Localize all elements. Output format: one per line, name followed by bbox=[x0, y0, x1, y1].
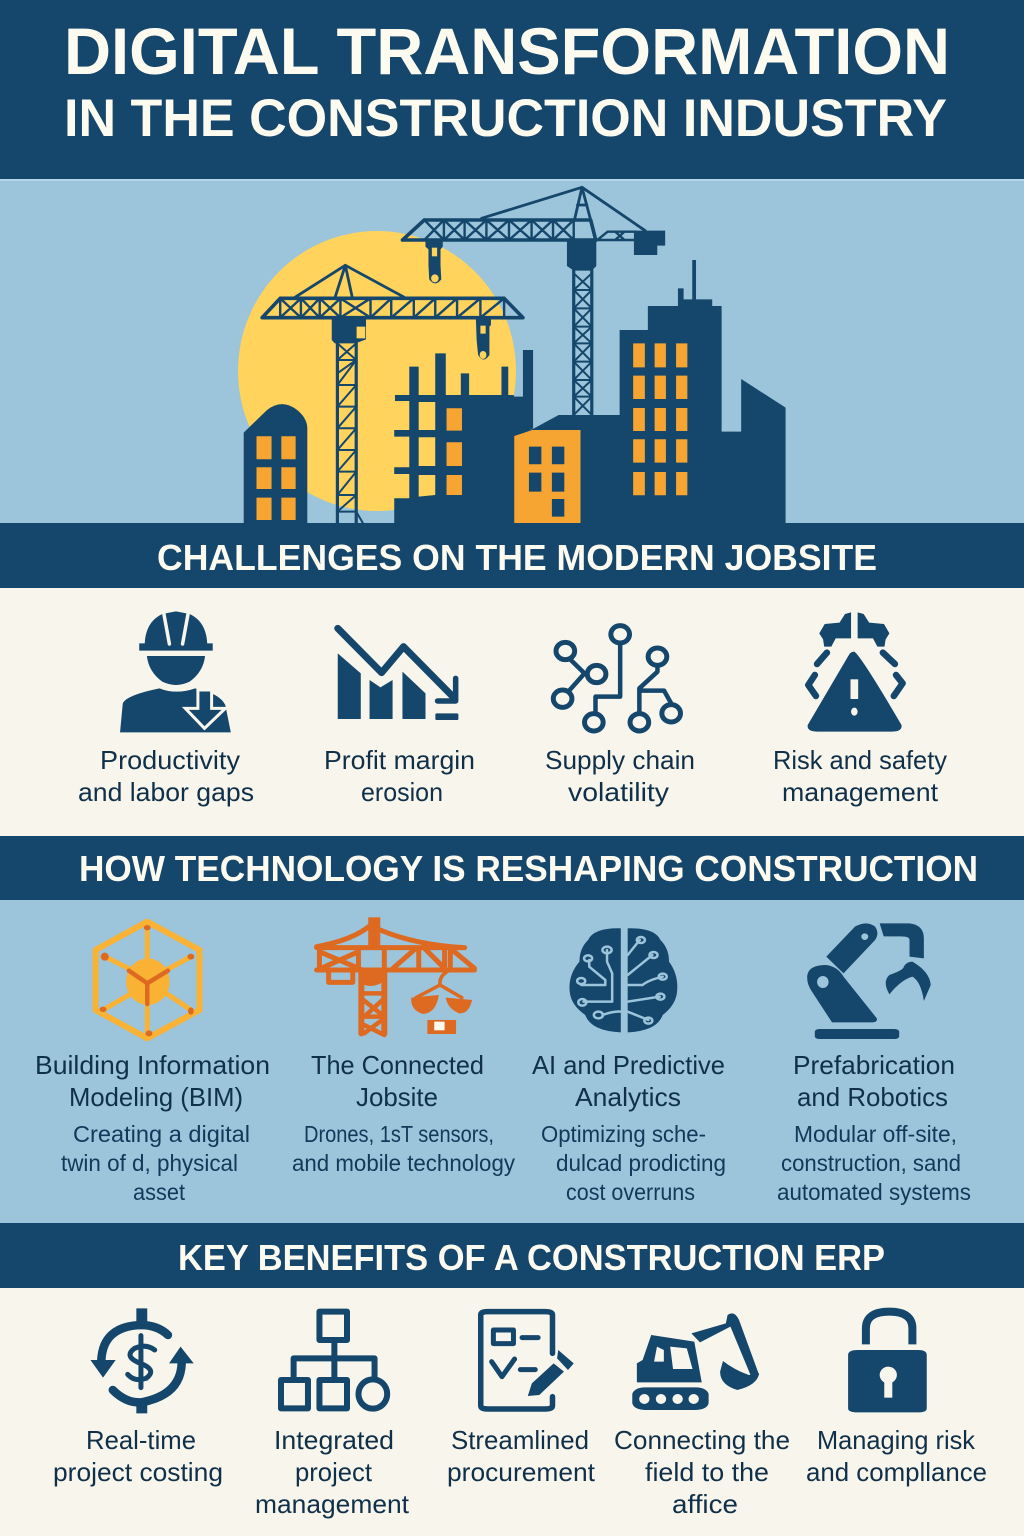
label bbox=[773, 745, 947, 807]
label: project costing bbox=[53, 1457, 223, 1487]
item: risk and safety bbox=[773, 612, 947, 807]
icon: checklist with pencil bbox=[481, 1312, 574, 1409]
label: Jobsite bbox=[356, 1082, 438, 1112]
building: arched left bbox=[244, 404, 307, 524]
description: dulcad prodicting bbox=[556, 1150, 726, 1176]
label: Real-time bbox=[86, 1425, 196, 1455]
label: Supply chain bbox=[545, 745, 695, 775]
label bbox=[447, 1425, 596, 1487]
description bbox=[61, 1121, 250, 1205]
label bbox=[545, 745, 695, 807]
label: Productivity bbox=[100, 745, 240, 775]
description: cost overruns bbox=[566, 1179, 695, 1205]
label bbox=[35, 1050, 270, 1112]
item: field to office bbox=[614, 1313, 790, 1519]
sun bbox=[238, 231, 516, 511]
front crane bbox=[262, 265, 523, 523]
description: asset bbox=[133, 1179, 186, 1205]
item: connected jobsite bbox=[292, 917, 515, 1176]
icon: circuit brain bbox=[569, 928, 677, 1032]
icon: warning triangle and gear bbox=[808, 612, 903, 732]
panel: benefits bbox=[0, 1288, 1024, 1536]
item: costing bbox=[53, 1308, 223, 1487]
label: management bbox=[255, 1489, 410, 1519]
panel: technology bbox=[0, 900, 1024, 1224]
description: Optimizing sche- bbox=[541, 1121, 706, 1147]
icon: excavator bbox=[632, 1313, 759, 1410]
item: robotics bbox=[777, 923, 971, 1205]
heading: benefits: KEY BENEFITS OF A CONSTRUCTION ERP bbox=[178, 1237, 885, 1278]
label: management bbox=[782, 777, 939, 807]
icon: orange crane bbox=[317, 917, 474, 1035]
label: project bbox=[295, 1457, 373, 1487]
icon: dollar cycle bbox=[90, 1308, 194, 1413]
label: affice bbox=[672, 1489, 738, 1519]
description: and mobile technology bbox=[292, 1150, 515, 1176]
label bbox=[806, 1425, 987, 1487]
description: Modular off-site, bbox=[794, 1121, 957, 1147]
building: tall tower bbox=[514, 260, 786, 524]
label: The Connected bbox=[311, 1050, 484, 1080]
label: Profit margin bbox=[324, 745, 475, 775]
description: construction, sand bbox=[781, 1150, 961, 1176]
building: orange block bbox=[514, 430, 580, 523]
item: project management bbox=[255, 1312, 410, 1519]
label: erosion bbox=[361, 777, 443, 807]
description: twin of d, physical bbox=[61, 1150, 238, 1176]
item: productivity bbox=[78, 611, 254, 807]
label: Risk and safety bbox=[773, 745, 947, 775]
label bbox=[532, 1050, 725, 1112]
label bbox=[255, 1425, 410, 1519]
label bbox=[53, 1425, 223, 1487]
panel: challenges bbox=[0, 588, 1024, 836]
label bbox=[793, 1050, 955, 1112]
label: Managing risk bbox=[817, 1425, 976, 1455]
heading: technology: HOW TECHNOLOGY IS RESHAPING CONSTRUCTION bbox=[79, 848, 978, 889]
section band: technology bbox=[0, 836, 1024, 901]
icon: org chart bbox=[281, 1312, 387, 1409]
label: Integrated bbox=[274, 1425, 394, 1455]
rear crane bbox=[403, 187, 665, 415]
icon: padlock bbox=[848, 1312, 927, 1412]
item: procurement bbox=[447, 1312, 596, 1487]
description bbox=[292, 1121, 515, 1176]
item: profit margin bbox=[324, 628, 475, 807]
title line 1: DIGITAL TRANSFORMATION bbox=[64, 14, 950, 88]
section band: challenges bbox=[0, 523, 1024, 588]
heading: challenges: CHALLENGES ON THE MODERN JOBSITE bbox=[157, 537, 877, 578]
label: procurement bbox=[447, 1457, 596, 1487]
hero illustration panel bbox=[0, 179, 1024, 524]
item: risk and compliance bbox=[806, 1312, 987, 1487]
label bbox=[311, 1050, 484, 1112]
label: Streamlined bbox=[451, 1425, 589, 1455]
label: AI and Predictive bbox=[532, 1050, 725, 1080]
item: AI bbox=[532, 928, 726, 1205]
label bbox=[78, 745, 254, 807]
description bbox=[541, 1121, 726, 1205]
icon: falling bar chart bbox=[338, 628, 458, 720]
label: Building Information bbox=[35, 1050, 270, 1080]
title line 2: IN THE CONSTRUCTION INDUSTRY bbox=[64, 89, 947, 148]
label: volatility bbox=[568, 777, 669, 807]
icon: supply chain nodes bbox=[553, 626, 680, 731]
label: and labor gaps bbox=[78, 777, 254, 807]
label: and Robotics bbox=[797, 1082, 948, 1112]
skyline and cranes bbox=[244, 187, 786, 524]
description: Drones, 1sT sensors, bbox=[304, 1121, 494, 1147]
item: supply chain bbox=[545, 626, 695, 807]
label: and compllance bbox=[806, 1457, 987, 1487]
building: scaffold frame bbox=[394, 350, 533, 524]
description bbox=[777, 1121, 971, 1205]
label: Connecting the bbox=[614, 1425, 790, 1455]
section band: benefits bbox=[0, 1223, 1024, 1288]
icon: robot arm bbox=[807, 923, 931, 1039]
label bbox=[614, 1425, 790, 1519]
label: Modeling (BIM) bbox=[69, 1082, 243, 1112]
description: automated systems bbox=[777, 1179, 971, 1205]
label: Analytics bbox=[575, 1082, 681, 1112]
header panel bbox=[0, 0, 1024, 179]
icon: worker with down arrow bbox=[120, 611, 231, 732]
description: Creating a digital bbox=[73, 1121, 250, 1147]
label: field to the bbox=[645, 1457, 769, 1487]
item: BIM bbox=[35, 922, 270, 1205]
icon: BIM hexagon bbox=[96, 922, 199, 1038]
label: Prefabrication bbox=[793, 1050, 955, 1080]
label bbox=[324, 745, 475, 807]
